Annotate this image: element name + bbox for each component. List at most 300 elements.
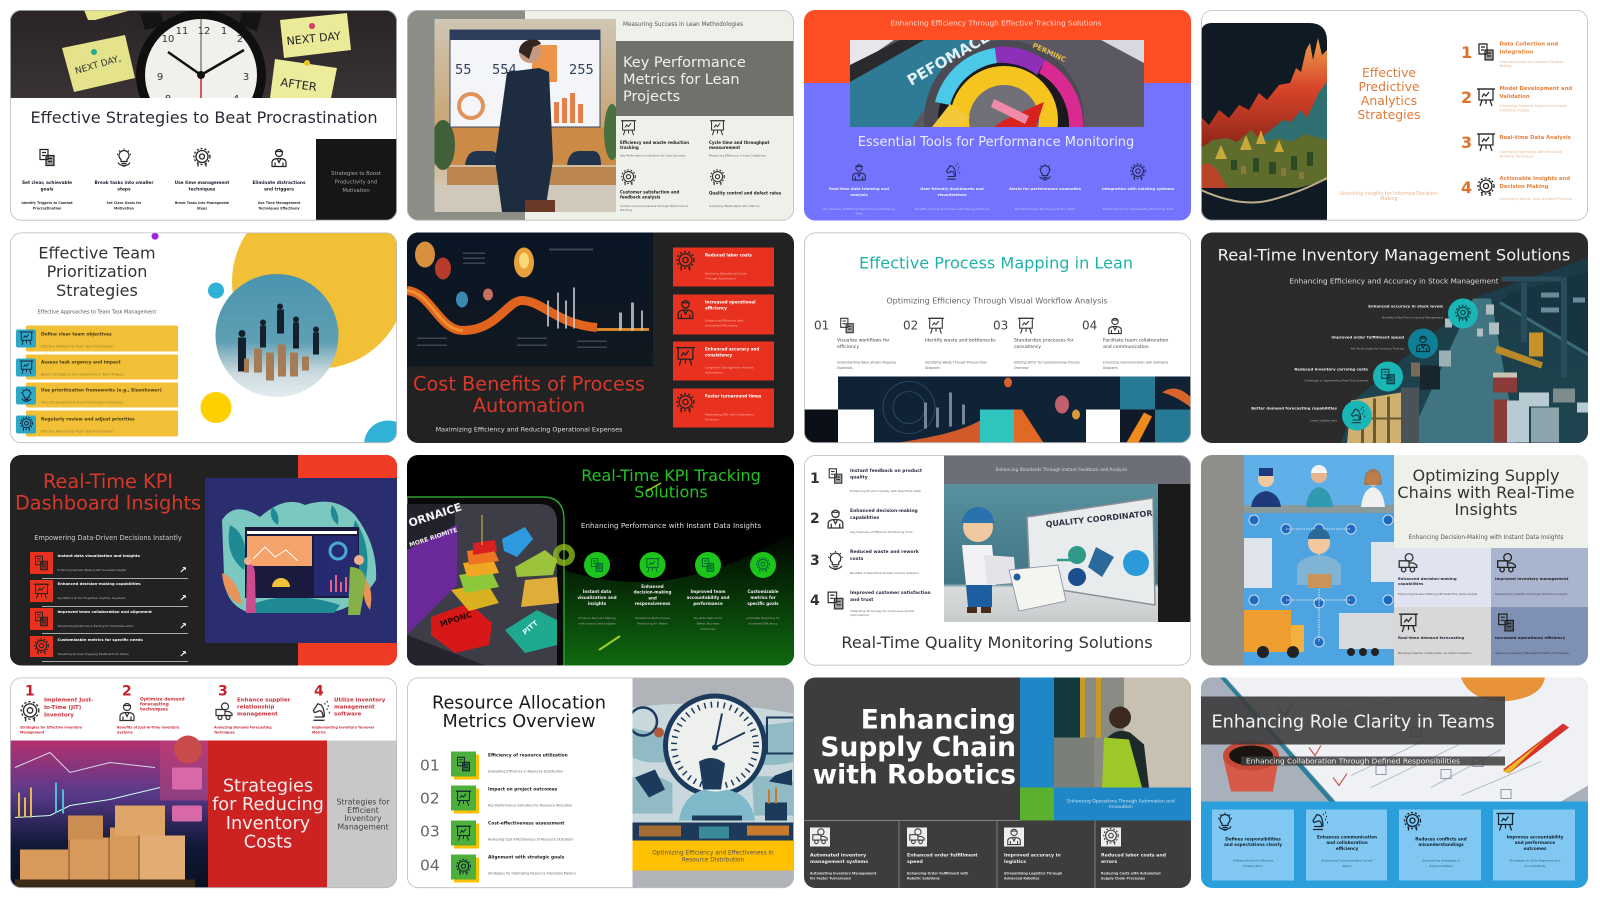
subtitle: Enhancing Efficiency and Accuracy in Stock Management [1289, 276, 1499, 286]
item 3: Use prioritization frameworks (e.g., Eisenhower) [41, 388, 162, 394]
row 01: Evaluating Efficiency in Resource Distribution [488, 770, 563, 774]
benefit card 2: efficiency [705, 306, 727, 310]
item: order fulfillment [907, 828, 978, 880]
step 01: Essentials [837, 366, 853, 370]
box: responsibilities: Defining Roles for Effective [1233, 858, 1273, 862]
list item 3: Improved team collaboration and alignment [58, 609, 152, 614]
image: businessman at dashboard: 554 [492, 63, 517, 78]
panel: Real-Time KPI Tracking Solutions [407, 455, 794, 666]
item: forecasting [1251, 400, 1372, 430]
list item 4: and trust [850, 597, 874, 603]
image: team on chess board [216, 274, 338, 397]
benefit card 1: Reducing Operational Costs [705, 272, 747, 276]
item: accuracy [1368, 298, 1478, 328]
title: Dashboard Insights [15, 492, 201, 514]
image: warehouse aerial [1341, 258, 1588, 444]
row 01: Efficiency of resource utilization [488, 752, 568, 758]
step 3: Analyzing Demand Forecasting [214, 726, 272, 730]
item: customer satisfaction: Tracking [619, 208, 632, 212]
list item 4: Customizable metrics for specific needs [58, 637, 143, 642]
item 4: Effective Methods for Team Task Prioritization [41, 430, 113, 434]
item 1: Making [1500, 64, 1511, 68]
kpi: custom metrics: Automate Reporting for [746, 616, 781, 620]
item 2 [16, 354, 178, 380]
title band: Enhancing Role Clarity in Teams [1211, 712, 1495, 732]
gray subtitle block: Strategies for [336, 798, 390, 806]
item: dashboards: User-friendly dashboards and [920, 186, 984, 191]
item 2: 2 [1461, 88, 1472, 107]
list item 4: Improved customer satisfaction [850, 590, 931, 596]
item: quality control: Quality control and defect rates [709, 190, 782, 196]
image: process city mosaic [804, 376, 1191, 444]
list item 2: ↗ [179, 594, 187, 604]
item: order fulfillment: Enhanced order fulfillment [907, 852, 978, 858]
step 04: 04 [1082, 318, 1097, 332]
item: cycle time: measurement [709, 145, 740, 150]
title: Solutions [634, 482, 708, 502]
item: automated inventory: management systems [810, 859, 868, 865]
kpi: instant data: Enhance Decision-Making [578, 616, 616, 620]
row 02: Impact on project outcomes [488, 786, 558, 792]
kpi: decision making: and [648, 595, 657, 600]
item: efficiency: tracking [620, 145, 639, 150]
list item 4 [810, 590, 931, 617]
image: supply chain network [1244, 455, 1394, 666]
item 4 [1461, 176, 1572, 201]
kpi: instant data [577, 552, 617, 625]
item: break tasks: Motivation [114, 207, 135, 211]
kpi: accountability: Better Business [697, 621, 720, 625]
title band: Metrics for Lean [623, 72, 740, 88]
item: set clear goals: Procrastination [33, 207, 62, 211]
title: Strategies [56, 281, 138, 300]
image: performance gauge: PERMINC [1031, 42, 1067, 64]
list item 3: 3 [810, 553, 820, 569]
kpi: custom metrics: specific goals [747, 601, 779, 606]
item: time management: Use time management [175, 180, 229, 186]
box: communication: Enhancing Communication Across [1321, 858, 1373, 862]
box: accountability: Strategies for Role Alignment and [1510, 858, 1560, 862]
band caption: Optimizing Efficiency and Effectiveness in [652, 850, 774, 856]
panel: Effective Strategies to Beat Procrastination [10, 10, 397, 221]
gray subtitle block: Efficient [347, 806, 379, 815]
title band [616, 41, 794, 116]
list item 3: Streamlining Performance Tracking for Immediate Action [58, 624, 134, 628]
step 2: Systems [117, 730, 133, 734]
box: communication: Enhances communication [1317, 834, 1377, 840]
box: accountability: Improves accountability [1507, 834, 1564, 840]
item: eliminate distractions: Techniques Effectively [258, 207, 301, 211]
box: communication [1306, 810, 1387, 880]
item: carrying costs: Reduced inventory carrying costs [1294, 366, 1369, 372]
quadrant: efficiency: Increased operational efficiency [1495, 635, 1566, 640]
item: efficiency: Key Performance Indicators for Lean Success [620, 154, 685, 158]
image: 3D data landscape [1201, 23, 1327, 220]
row 04 [420, 854, 576, 882]
image: KPI staircase blocks: ORNAICE [407, 500, 463, 530]
title: Metrics Overview [442, 712, 596, 732]
item: integration: Integration with existing systems [1102, 186, 1175, 191]
item: eliminate distractions: Eliminate distractions [252, 180, 306, 186]
step 2: forecasting [140, 702, 169, 708]
panel: Essential Tools for Performance Monitoring [804, 10, 1191, 221]
item: efficiency [620, 121, 689, 158]
item: data tracking [823, 165, 895, 216]
gray subtitle block [327, 740, 397, 888]
step 1: Inventory [44, 712, 74, 718]
item 4: Regularly review and adjust priorities [41, 416, 135, 422]
kpi: instant data: with Instant Data Insights [578, 621, 616, 625]
item: alerts [1009, 164, 1082, 211]
item: break tasks: Break tasks into smaller [95, 180, 154, 186]
list item 2: 2 [810, 511, 820, 527]
gray subtitle block: Inventory [344, 814, 382, 823]
row 01 [420, 752, 568, 780]
image: alarm clock and sticky notes: 3 [243, 72, 249, 83]
step 02: 02 [903, 318, 918, 332]
list item 1 [810, 468, 923, 493]
subtitle: Effective Approaches to Team Task Management [38, 310, 156, 316]
item 4 [16, 410, 178, 436]
row 03: 03 [420, 822, 440, 840]
item: labor costs: Supply Chain Processes [1101, 876, 1145, 880]
title: Predictive [1358, 79, 1420, 94]
list item 2 [30, 580, 188, 607]
title: Real-Time KPI Tracking [581, 466, 761, 485]
item: efficiency: Efficiency and waste reduction [620, 140, 689, 145]
benefit card 4: Faster turnaround times [705, 394, 762, 398]
title: Enhancing [861, 704, 1016, 736]
panel: Real-Time KPI Dashboard Insights [10, 455, 397, 666]
benefit card 3 [673, 342, 774, 380]
item: customer satisfaction: Continuous Improvement through Performance [620, 204, 688, 208]
item: carrying costs [1294, 362, 1403, 392]
benefit card 4: Solutions [705, 418, 719, 422]
benefit card 1 [673, 248, 774, 286]
step 1: Strategies for Effective Inventory [20, 726, 83, 730]
list item 2: Key Features of Effective Monitoring Tools [850, 530, 913, 534]
step 03 [993, 318, 1080, 370]
box: accountability: Accountability [1524, 864, 1546, 868]
box: responsibilities: and expectations clearly [1224, 842, 1282, 847]
step 01: Visualize workflows for [837, 338, 890, 344]
item 2: Balancing Urgency and Importance in Team Projects [41, 372, 124, 376]
subtitle: Empowering Data-Driven Decisions Instantly [34, 534, 182, 542]
step 2: Benefits of Just-in-Time Inventory [117, 726, 180, 730]
step 01: 01 [814, 318, 829, 332]
item: order fulfillment: Robotic Solutions [907, 876, 940, 880]
colored blocks with caption: Enhancing Operations Through Automation and [1067, 798, 1175, 804]
item: logistics: Streamlining Logistics Through [1004, 872, 1063, 876]
item: break tasks [95, 148, 154, 211]
image: alarm clock and sticky notes [10, 10, 397, 98]
step 1: In-Time (JIT) [44, 705, 82, 711]
step 02: Identifying Waste Through Process Flow [925, 360, 987, 364]
list item 1: 1 [810, 471, 820, 487]
box: conflicts: Overcoming Ambiguity in [1422, 858, 1460, 862]
step 3: 3 [218, 684, 228, 700]
step 4: Implementing Inventory Turnover [312, 726, 375, 730]
image: alarm clock and sticky notes: 10 [162, 34, 174, 45]
item 2: Enhancing Customer Experience through [1500, 104, 1567, 108]
step 04: Diagrams [1103, 366, 1118, 370]
list item 4: 4 [810, 593, 820, 609]
image: checklist, cup and pencil [1201, 678, 1588, 802]
benefit card 2: Automated Processes [705, 324, 738, 328]
title: Effective [1362, 65, 1416, 80]
panel: Optimizing Supply Chains with Real-Time Insights [1201, 455, 1588, 666]
row 02 [420, 786, 572, 814]
quadrant: efficiency: Improving Inventory Management with Live Tracking [1495, 651, 1569, 655]
title: Prioritization [47, 262, 147, 281]
item: alerts: Top Performance Monitoring Tools in 2023 [1014, 207, 1075, 211]
image: inventory boxes with charts [10, 736, 208, 888]
item: set clear goals [21, 150, 73, 211]
row 04: Strategies for Optimizing Resource Allocation Metrics [488, 872, 576, 876]
list item 1 [30, 552, 188, 579]
panel: Strategies for Reducing Inventory Costs [10, 678, 397, 888]
box: communication: and collaboration [1326, 840, 1368, 845]
item 1 [16, 326, 178, 352]
item: cycle time: Cycle time and throughput [709, 140, 770, 145]
item: set clear goals: goals [41, 186, 54, 192]
subtitle band: Enhancing Collaboration Through Defined Responsibilities [1246, 756, 1460, 766]
step 1 [20, 684, 93, 734]
item: automated inventory [810, 828, 877, 880]
item 4: Actionable Insights and [1500, 176, 1570, 182]
step 02: Diagrams [925, 366, 940, 370]
image: KPI staircase blocks: PITT [521, 619, 540, 637]
item: forecasting: Better demand forecasting capabilities [1251, 406, 1338, 410]
quadrant: inventory: Improved inventory management [1495, 576, 1569, 581]
item 1: Effective Methods for Team Task Prioritization [41, 344, 113, 348]
item 3: 3 [1461, 133, 1472, 152]
item 4: 4 [1461, 178, 1472, 197]
item: data tracking: analysis [850, 192, 868, 197]
image: alarm clock and sticky notes: 9 [157, 72, 163, 83]
item: accuracy: Benefits of Real-Time Inventory Management [1382, 316, 1443, 320]
list item 3: ↗ [179, 622, 187, 632]
item: quality control: Analyzing Waste Reduction Metrics [709, 204, 760, 208]
benefit card 3: Automation [705, 371, 723, 375]
kpi: accountability: Outcomes [701, 627, 716, 631]
list item 1: Enhancing Product Quality with Real-Time Data [850, 489, 921, 493]
row 04: 04 [420, 856, 440, 874]
decorative lime marks [556, 483, 661, 650]
item: automated inventory: Automated inventory [810, 852, 866, 858]
subtitle: Optimizing Efficiency Through Visual Workflow Analysis [886, 296, 1108, 306]
title: Real-Time Quality Monitoring Solutions [841, 633, 1153, 652]
item: dashboards [915, 164, 990, 211]
illustration: analytics screen with people [205, 478, 397, 643]
kpi: decision making: Monitoring for Teams [637, 621, 668, 625]
title: Chains with Real-Time [1397, 483, 1575, 502]
benefit card 2: Enhancing Efficiency with [705, 318, 744, 322]
step 3: Techniques [214, 730, 235, 734]
top band [944, 455, 1191, 484]
benefit card 3: consistency [705, 352, 733, 358]
image: balloons and orange ribbon [407, 232, 653, 366]
item: integration [1102, 164, 1175, 211]
item: eliminate distractions [252, 150, 306, 211]
kpi: custom metrics: metrics for [750, 595, 776, 600]
panel: Enhancing Supply Chain with Robotics [804, 678, 1191, 888]
red title block: for Reducing [212, 795, 324, 815]
item: order fulfillment: Enhancing Order Fulfillment with [907, 872, 969, 876]
row 03: Cost-effectiveness assessment [488, 820, 564, 826]
image: quality coordinator: QUALITY COORDINATOR [1045, 509, 1153, 529]
item: set clear goals: Set clear, achievable [22, 180, 72, 186]
list item 4: ↗ [179, 650, 187, 660]
image: performance gauge: PEFOMACE [904, 28, 993, 89]
subtitle: Measuring Success in Lean Methodologies [623, 22, 743, 28]
item 4: Forecasting Trends: Tools and Best Practices [1500, 197, 1572, 201]
item: labor costs: Reduced labor costs and [1101, 852, 1166, 858]
step 1: Management [20, 730, 45, 734]
box: accountability: and performance [1515, 840, 1555, 845]
quadrant: forecasting: Boosting Supplier Collaboration via Instant Analytics [1398, 651, 1472, 655]
list item 1: quality [850, 474, 868, 480]
step 3 [214, 684, 291, 734]
image: KPI staircase blocks: MORE RIOMITE [408, 527, 458, 549]
list item 1: ↗ [179, 566, 187, 576]
subtitle: Making [1380, 196, 1398, 202]
list item 1: Instant feedback on product [850, 468, 923, 474]
list item 4: Integrating Technology for Continuous Quality [850, 609, 915, 613]
kpi: instant data: visualization and [577, 595, 617, 600]
row 03 [420, 820, 574, 848]
item: logistics: logistics [1004, 859, 1026, 865]
item 3 [16, 382, 178, 408]
kpi: accountability: Visualize Metrics for [693, 616, 723, 620]
quadrant: decision making [1394, 548, 1491, 607]
gray subtitle block: Management [337, 822, 389, 831]
quadrant: forecasting [1394, 607, 1491, 666]
row 01: 01 [420, 756, 440, 774]
image: alarm clock and sticky notes: NEXT DAY [286, 29, 342, 48]
item: break tasks: Set Clear Goals for [107, 201, 142, 205]
step 4: management [334, 704, 375, 710]
list item 2: capabilities [850, 515, 880, 521]
item: customer satisfaction: Customer satisfaction and [620, 190, 679, 194]
item: time management [175, 148, 230, 211]
item: accuracy: Enhanced accuracy in stock levels [1368, 304, 1444, 308]
step 3: Enhance supplier [237, 698, 291, 704]
title: Insights [1455, 500, 1517, 519]
item: quality control [709, 170, 782, 208]
row 04: Alignment with strategic goals [488, 854, 565, 860]
panel: Key Performance Metrics for Lean Projects [407, 10, 794, 221]
kpi: decision making [634, 552, 671, 625]
row 02: 02 [420, 790, 440, 808]
panel: Real-Time Inventory Management Solutions [1201, 232, 1588, 444]
subtitle: Enhancing Performance with Instant Data Insights [581, 521, 761, 530]
benefit card 3: Enhanced accuracy and [705, 346, 759, 352]
benefit card 4: Maximizing ROI with Automation [705, 412, 754, 416]
item: break tasks: steps [117, 186, 131, 192]
item 1: Leveraging Data for Informed Decision- [1500, 60, 1565, 64]
box: responsibilities: Collaboration [1243, 864, 1263, 868]
kpi: decision making: Streamline Performance [635, 616, 670, 620]
title: Resource Allocation [432, 694, 606, 714]
item: labor costs: Reducing Costs with Automated [1101, 872, 1161, 876]
item 3: Tools for Streamlining Team Prioritization Processes [40, 400, 123, 404]
step 1: Implement Just- [44, 698, 93, 704]
callout: productivity note: Strategies to Boost [331, 171, 381, 177]
item: labor costs [1101, 828, 1166, 880]
item 4: Decision Making [1500, 184, 1549, 190]
image: businessman at dashboard: 255 [569, 63, 594, 78]
benefit card 2 [673, 294, 774, 334]
kpi: accountability [687, 552, 729, 631]
kpi: instant data: insights [588, 601, 607, 606]
step 04: and communication [1103, 344, 1149, 350]
step 02 [903, 318, 996, 370]
panel: Real-Time Quality Monitoring Solutions [804, 455, 1191, 666]
quadrant: decision making: capabilities [1398, 581, 1424, 586]
item: time management: techniques [189, 186, 216, 192]
benefit card 1: Reduced labor costs [705, 252, 752, 258]
quadrant: decision making: Enhanced decision-making [1398, 576, 1457, 581]
item 1: Data Collection and [1500, 42, 1558, 48]
step 04: Enhancing Communication with Swimlane [1103, 360, 1168, 364]
list item 1: Enhancing Decision-Making with Live Data Insights [58, 568, 127, 572]
image: alarm clock and sticky notes: NEXT DAY, [74, 54, 122, 77]
item 2: Predictive Insights [1500, 108, 1530, 112]
item 2: Assess task urgency and impact [41, 360, 121, 366]
item 3: Real-time Data Analysis [1500, 135, 1571, 141]
list item 3: Benefits of Real-Time Quality Control Systems [850, 571, 919, 575]
kpi: instant data: Instant data [583, 589, 611, 594]
step 03: Utilizing SIPOC for Comprehensive Process [1014, 360, 1080, 364]
item 2 [1461, 86, 1572, 112]
step 04: Facilitate team collaboration [1103, 338, 1168, 344]
subtitle: Enhancing Decision-Making with Instant Data Insights [1409, 535, 1563, 541]
step 01: efficiency [837, 344, 859, 350]
list item 3 [30, 608, 188, 634]
box: responsibilities: Defines responsibilities [1225, 836, 1281, 842]
item: integration: Best Practices for Implementing Monitoring Tools [1103, 207, 1174, 211]
list item 2: Enhanced decision-making [850, 508, 918, 514]
panel: Resource Allocation Metrics Overview [407, 678, 794, 888]
image: alarm clock and sticky notes: 11 [176, 26, 188, 37]
quadrant: inventory: Streamlining Operations through Predictive Insights [1495, 592, 1568, 596]
top band: Enhancing Standards Through Instant Feedback and Analysis [996, 467, 1128, 473]
title: Effective Strategies to Beat Procrastination [30, 108, 378, 127]
item: logistics: Improved accuracy in [1004, 852, 1061, 858]
quadrant: forecasting: Real-time demand forecasting [1398, 635, 1465, 640]
title: Strategies [1357, 107, 1421, 122]
title: Real-Time KPI [43, 470, 173, 493]
kpi: custom metrics [746, 552, 781, 625]
item 2: Model Development and [1500, 86, 1572, 92]
list item 2: Key Metrics at Your Fingertips: Anytime, Anywhere [58, 596, 126, 600]
item: automated inventory: Automating Inventory Management [810, 872, 877, 876]
box: conflicts: misunderstandings [1418, 842, 1464, 847]
step 03: Overview [1014, 366, 1029, 370]
title band: Projects [623, 89, 680, 105]
image: alarm clock and sticky notes: 8 [165, 94, 171, 105]
image: alarm clock and sticky notes: 4 [233, 94, 239, 105]
title band: Key Performance [623, 55, 746, 71]
step 4: 4 [314, 684, 324, 700]
kpi: decision making: Enhanced [641, 584, 664, 589]
item: data tracking: Tools [854, 212, 863, 216]
panel: Effective Predictive Analytics Strategies [1201, 10, 1588, 221]
image: warehouse worker [1054, 678, 1191, 788]
subtitle: Unlocking Insights for Informed Decision- [1340, 191, 1439, 197]
step 02: Identify waste and bottlenecks [925, 338, 996, 344]
